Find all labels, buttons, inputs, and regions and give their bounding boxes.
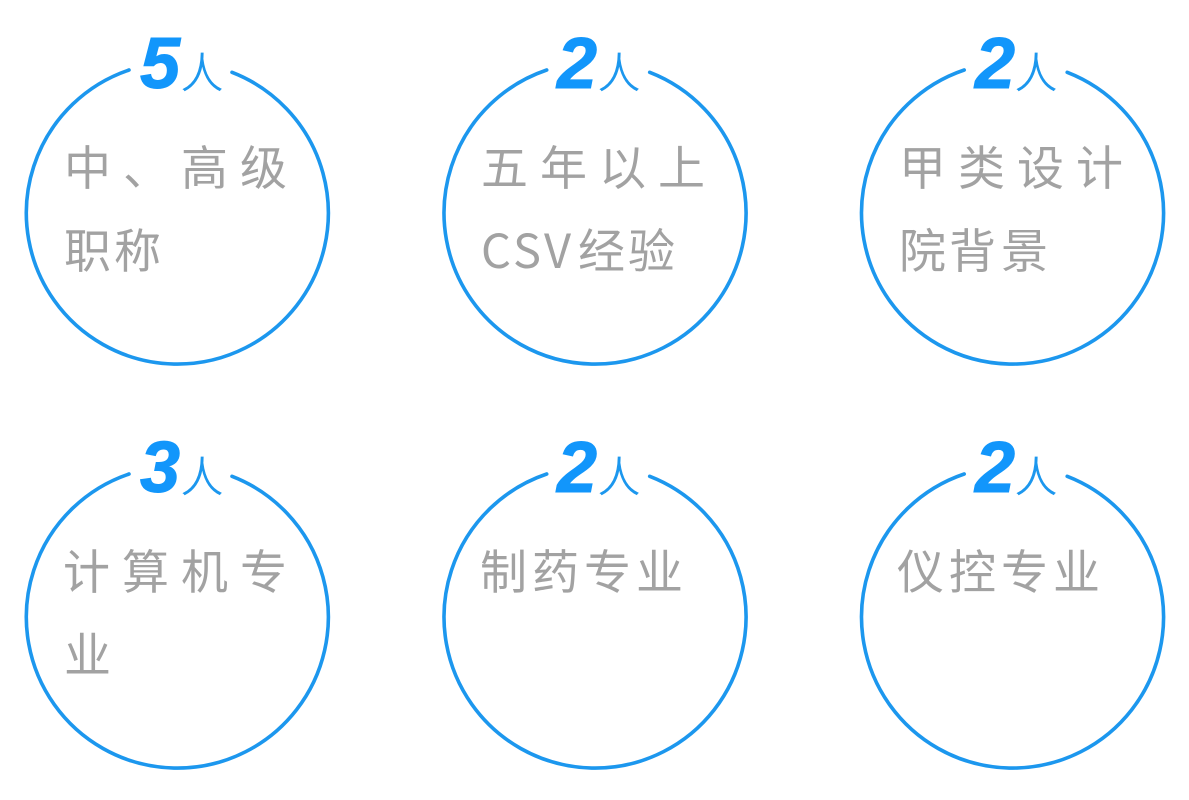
label 中、高级职称: 中、高级 [64,130,287,199]
count 2: 2 [555,428,597,508]
circle ring 3 [862,70,1164,364]
unit 人: 人 [598,40,640,101]
unit 人: 人 [181,444,223,505]
label 甲类设计院背景: 院背景 [899,213,1048,282]
label 甲类设计院背景: 甲类设计 [899,130,1123,199]
panel: 2 people, five years CSV [444,24,746,364]
unit 人: 人 [1015,40,1057,101]
label 五年以上CSV经验: CSV经验 [481,213,675,282]
label 五年以上CSV经验: 五年以上 [481,130,705,199]
circle ring 1 [26,70,328,364]
circle ring 2 [444,70,746,364]
label 仪控专业: 仪控专业 [897,534,1100,603]
unit 人: 人 [598,444,640,505]
count 2: 2 [555,24,597,104]
circle ring 5 [444,474,746,768]
circle ring 4 [26,474,328,768]
panel: 3 people, computer science [26,428,328,768]
count 2: 2 [973,24,1015,104]
unit 人: 人 [1015,444,1057,505]
unit 人: 人 [181,40,223,101]
label 制药专业: 制药专业 [480,534,683,603]
label 计算机专业: 计算机专 [63,534,287,603]
panel: 2 people, instrumentation [862,428,1164,768]
label 中、高级职称: 职称 [64,213,161,282]
circle ring 6 [862,474,1164,768]
count 2: 2 [973,428,1015,508]
panel: 2 people, class A design institute [862,24,1164,364]
count 5: 5 [140,24,181,104]
panel: 5 people, mid-senior title [26,24,328,364]
count 3: 3 [140,428,180,508]
panel: 2 people, pharmacy [444,428,746,768]
label 计算机专业: 业 [64,617,111,686]
